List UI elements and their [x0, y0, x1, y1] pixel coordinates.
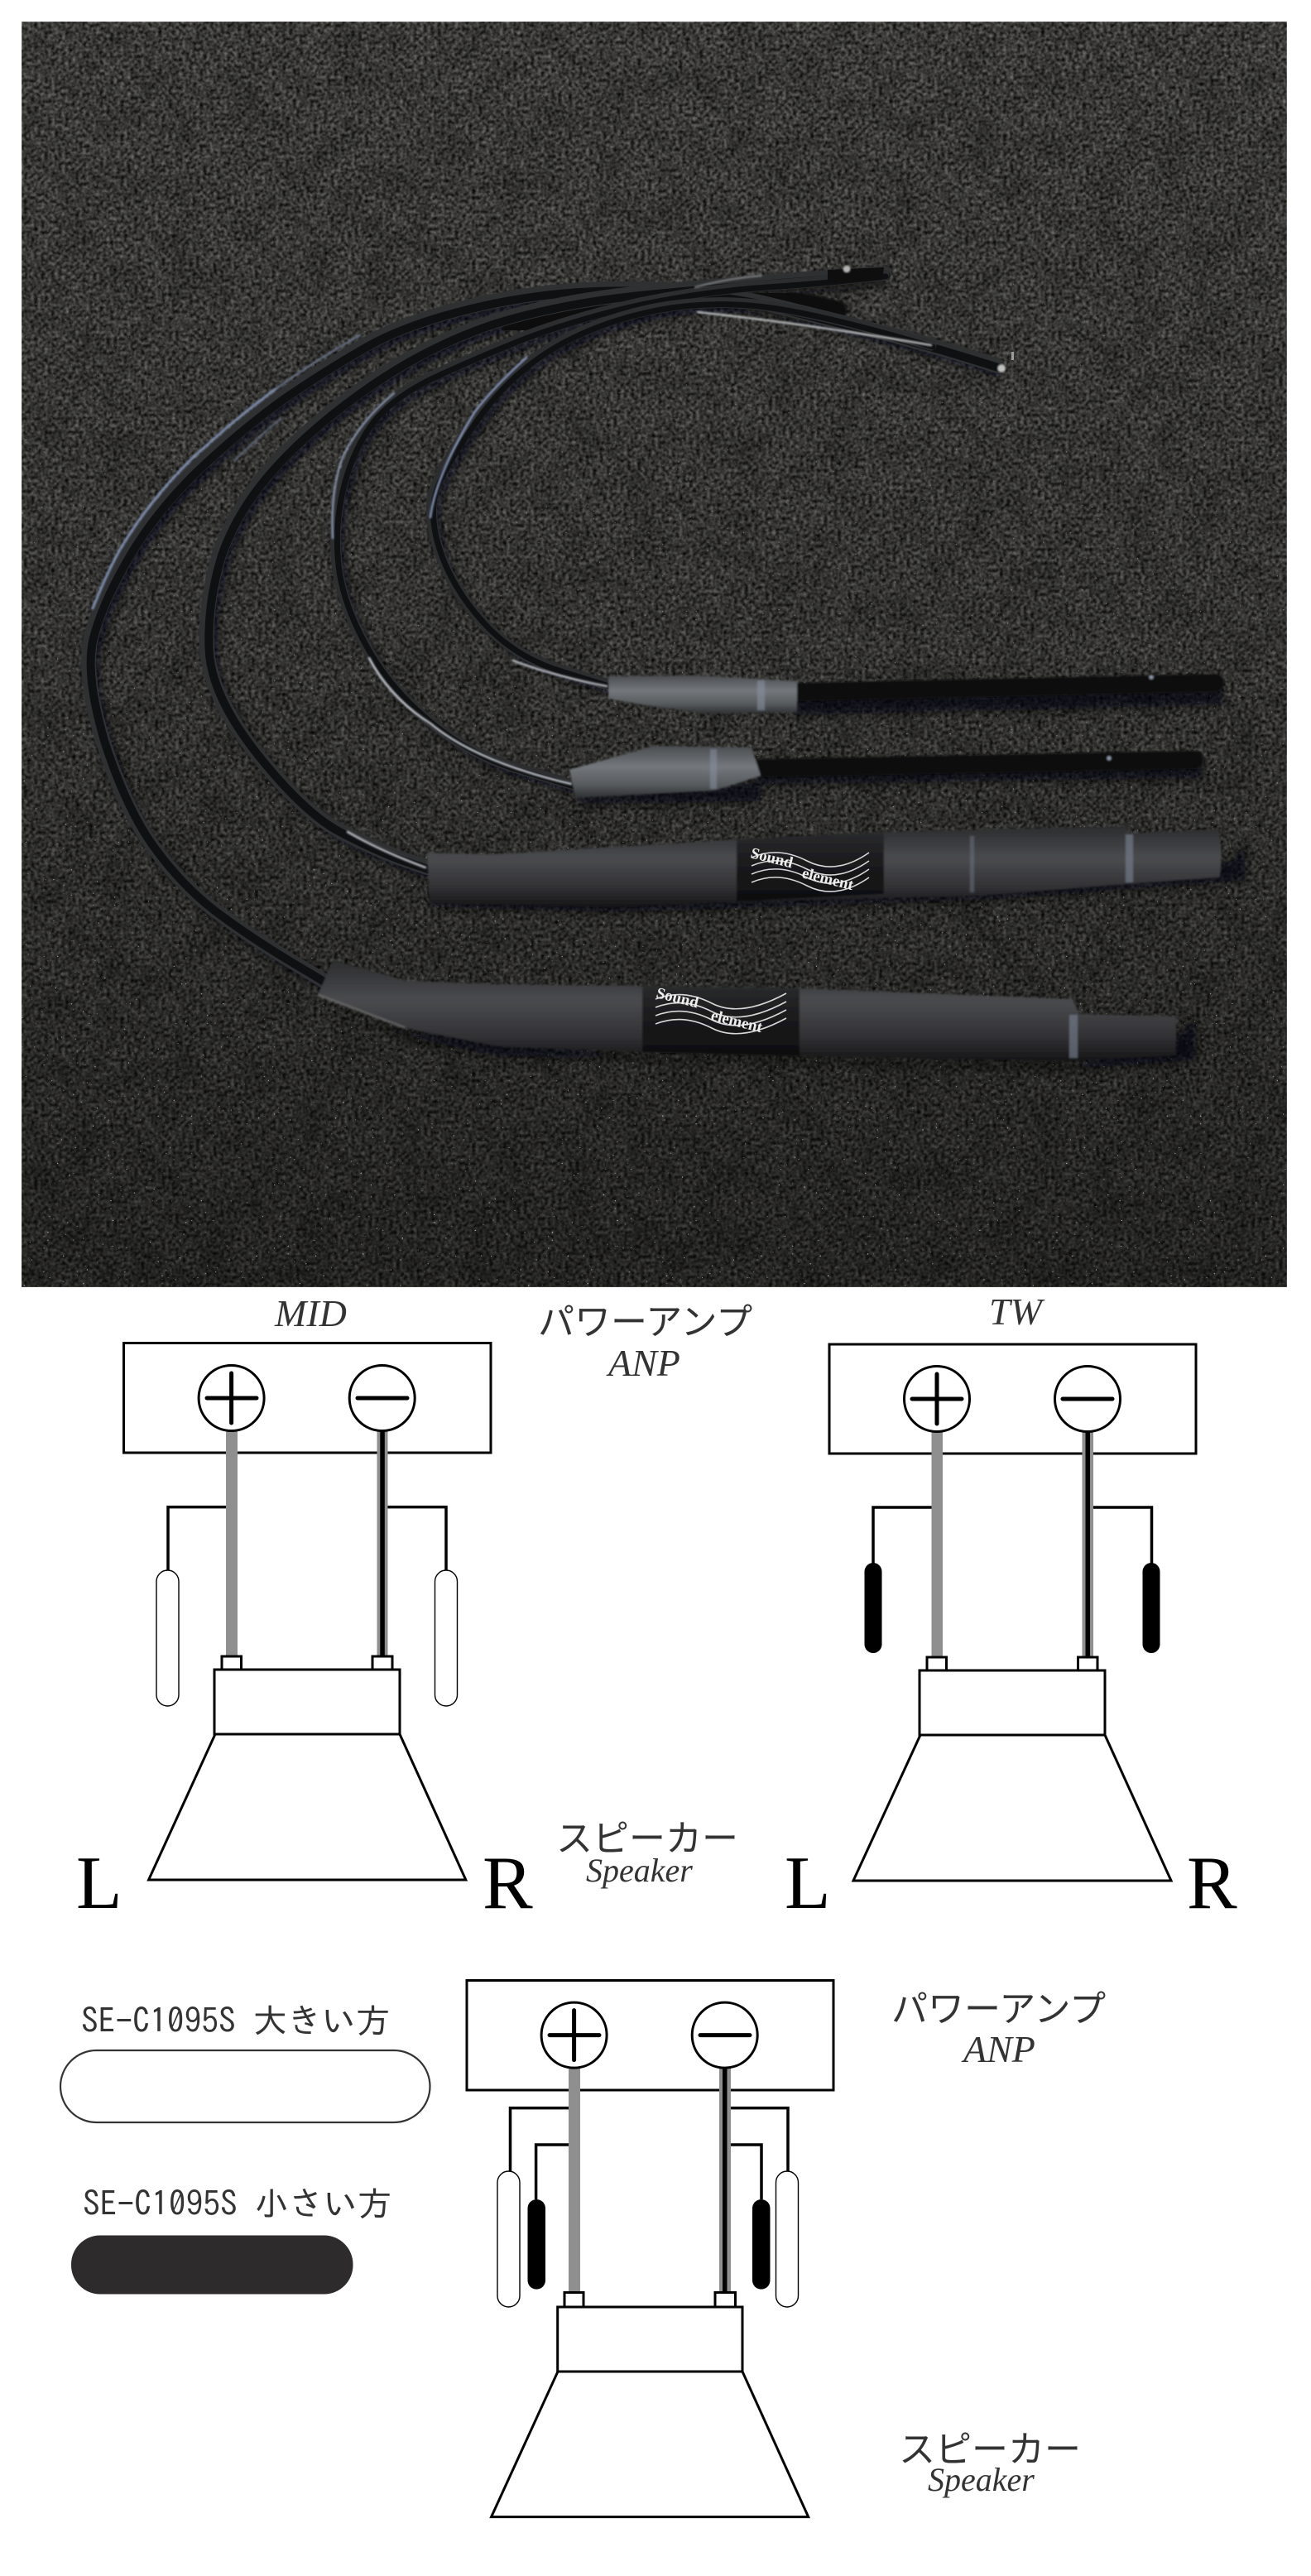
legend: small capsule: SE-C1095S 小さい方	[83, 2185, 392, 2220]
sleeve: large cable 4	[318, 960, 1176, 1061]
terminal plus	[199, 1366, 264, 1430]
legend: large capsule: SE-C1095S 大きい方	[81, 2002, 391, 2037]
positive wire	[569, 2065, 580, 2293]
sleeve: small cable 1	[608, 675, 1215, 714]
cable wires	[89, 273, 1000, 987]
photo: four cable assemblies on dark carpet	[22, 22, 1287, 1287]
label: R (MID): R	[483, 1841, 533, 1925]
label: speaker (bottom): Speaker	[928, 2461, 1035, 2498]
negative wire	[1083, 1428, 1093, 1658]
speaker	[492, 2293, 809, 2517]
logo on cable 4	[655, 984, 786, 1036]
logo on cable 3	[749, 844, 869, 894]
large capsules	[156, 1570, 457, 1706]
tube shadows	[331, 689, 1246, 1069]
heading: MID: MID	[274, 1292, 347, 1334]
label: L (MID): L	[76, 1841, 122, 1925]
label: power amp (top): ANP	[606, 1342, 680, 1384]
negative wire	[719, 2065, 731, 2293]
positive wire	[226, 1428, 238, 1656]
merged dark wire bundle	[513, 296, 836, 327]
branch wires	[873, 1507, 1152, 1564]
label: L (TW): L	[785, 1841, 831, 1925]
label: power amp (bottom): ANP	[961, 2028, 1035, 2070]
legend: small capsule	[71, 2185, 392, 2295]
label: speaker (bottom): スピーカー	[899, 2429, 1081, 2470]
carpet background	[22, 22, 1287, 1287]
terminal minus	[692, 2002, 757, 2068]
logo on cable 3: Sound	[749, 844, 795, 872]
label: R (TW): R	[1187, 1841, 1237, 1925]
speaker	[149, 1656, 466, 1880]
label: speaker (bottom)	[899, 2429, 1081, 2498]
amp box	[829, 1344, 1196, 1454]
label: power amp (top)	[538, 1302, 752, 1384]
terminal minus	[1054, 1366, 1121, 1432]
terminal plus	[904, 1366, 970, 1432]
wire highlights	[93, 276, 931, 867]
label: power amp (bottom)	[891, 1989, 1106, 2070]
logo on cable 4: element	[709, 1007, 765, 1036]
heading: TW: TW	[989, 1290, 1045, 1333]
wire shadows	[94, 279, 1002, 991]
branch wires	[510, 2108, 788, 2199]
amp box	[467, 1980, 833, 2090]
logo on cable 3: element	[800, 864, 856, 894]
cable tips	[828, 265, 1014, 372]
large capsules	[497, 2171, 798, 2307]
small capsules	[864, 1563, 1160, 1653]
label: speaker (top): スピーカー	[556, 1819, 738, 1859]
legend: large capsule	[60, 2002, 430, 2122]
positive wire	[932, 1428, 943, 1658]
diagram: TW wiring	[829, 1344, 1196, 1881]
sleeve: small cable 2	[569, 746, 1194, 798]
amp box	[124, 1343, 491, 1453]
negative wire	[377, 1428, 387, 1656]
diagram: combined wiring	[467, 1980, 833, 2517]
diagram: MID wiring	[124, 1343, 491, 1880]
sleeve: large cable 3	[427, 826, 1222, 907]
small capsules	[528, 2199, 770, 2290]
terminal plus	[541, 2002, 607, 2068]
label: speaker (top)	[556, 1819, 738, 1889]
branch wires	[168, 1507, 446, 1570]
label: speaker (top): Speaker	[586, 1852, 693, 1889]
speaker	[853, 1657, 1171, 1881]
logo on cable 4: Sound	[655, 984, 701, 1012]
label: power amp (top): パワーアンプ	[538, 1302, 752, 1343]
terminal minus	[349, 1366, 415, 1430]
label: power amp (bottom): パワーアンプ	[891, 1989, 1106, 2030]
